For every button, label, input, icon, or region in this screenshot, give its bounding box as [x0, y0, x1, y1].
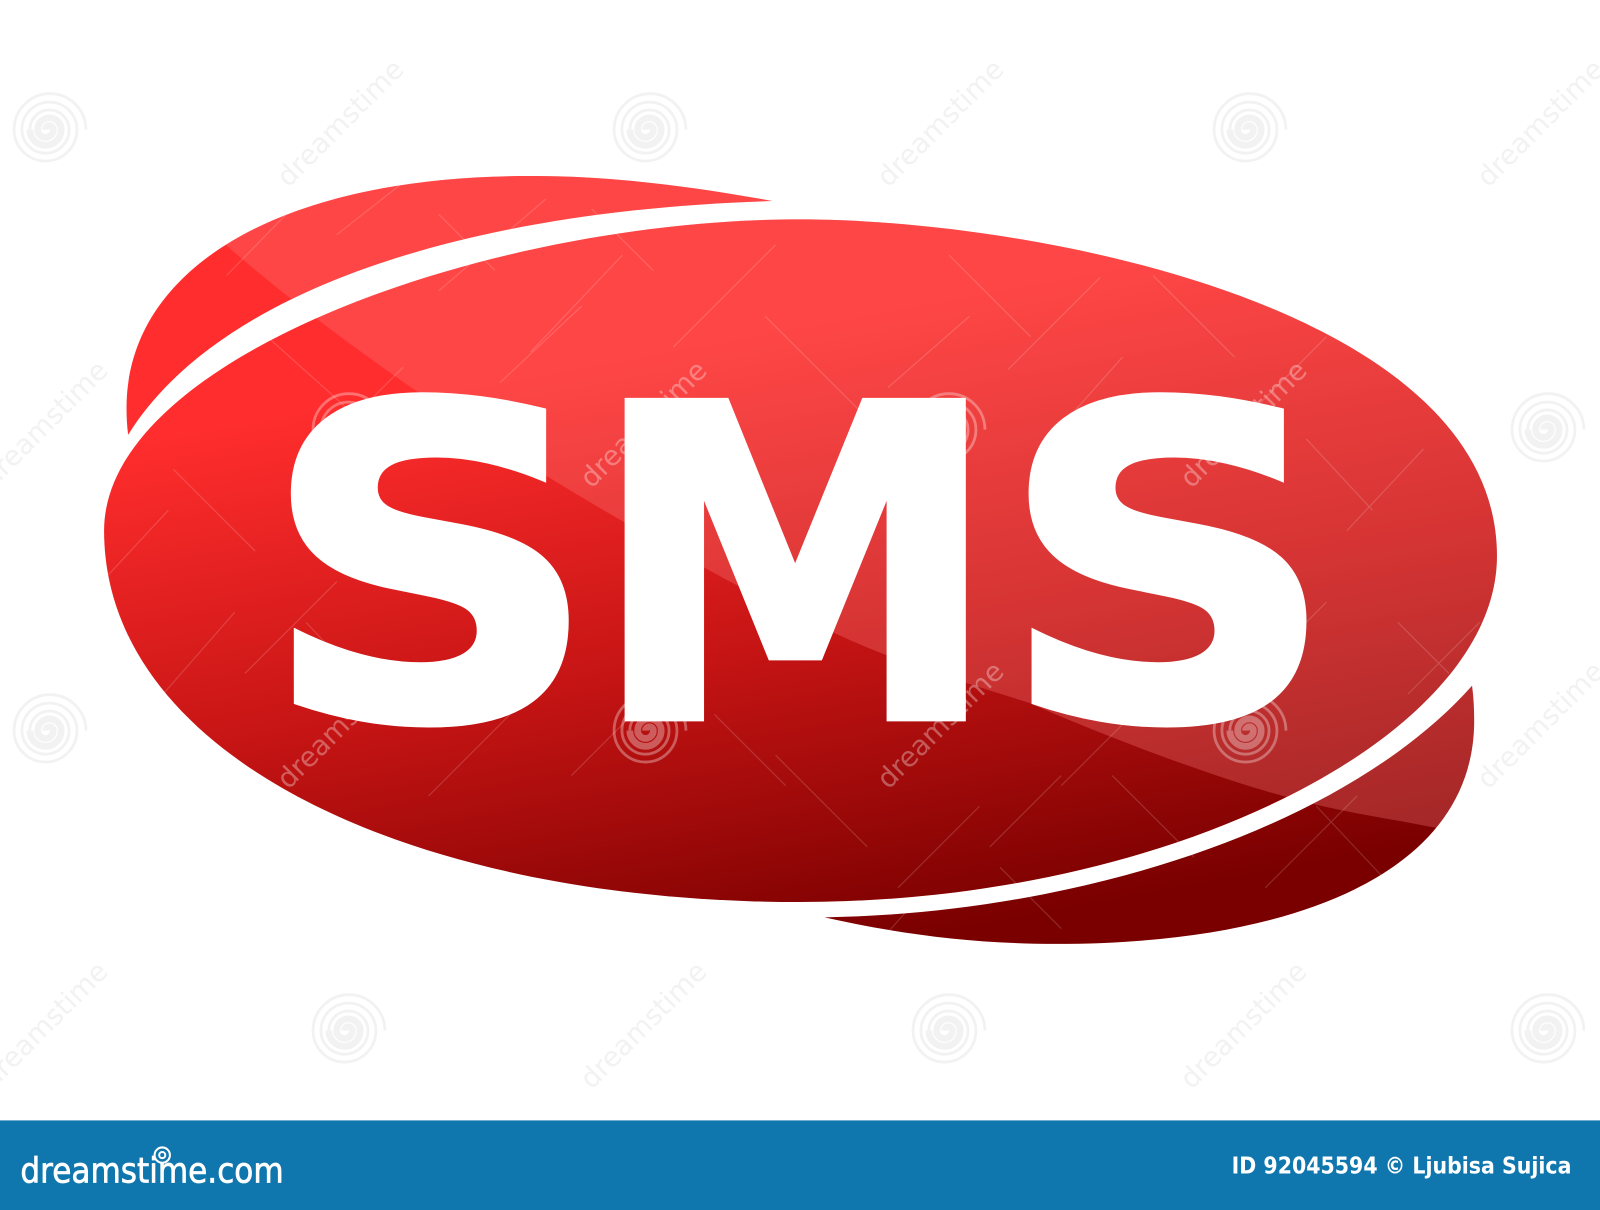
- watermark layer on red: dreamstime: [871, 655, 1010, 795]
- banner background: [0, 1120, 1600, 1210]
- footer banner: [0, 1120, 1600, 1210]
- faint watermark lines: [102, 179, 1480, 944]
- letter S: S: [998, 316, 1338, 822]
- glossy highlight: [226, 176, 1497, 828]
- watermark layer on red: dreamstime: [271, 655, 410, 795]
- watermark layer on white: dreamstime: [271, 53, 410, 193]
- lower swoosh: [824, 686, 1474, 944]
- watermark layer on white: dreamstime: [871, 53, 1010, 193]
- watermark layer on white: dreamstime: [1174, 955, 1313, 1095]
- watermark layer on red: [271, 354, 1313, 795]
- logo swirl: [155, 1147, 170, 1163]
- letter S: S: [260, 316, 600, 822]
- watermark layer on white: dreamstime: [574, 955, 713, 1095]
- dreamstime logo: [20, 1147, 284, 1192]
- letter M: M: [589, 315, 1001, 822]
- red SMS oval badge with swooshes: [104, 176, 1497, 944]
- watermark layer on red: dreamstime: [1174, 354, 1313, 494]
- watermark layer on red: dreamstime: [574, 354, 713, 494]
- logo wordmark: dreamstime.com: [20, 1152, 284, 1192]
- upper swoosh: [127, 176, 772, 435]
- SMS title text: [260, 315, 1338, 822]
- main red oval: [104, 219, 1497, 902]
